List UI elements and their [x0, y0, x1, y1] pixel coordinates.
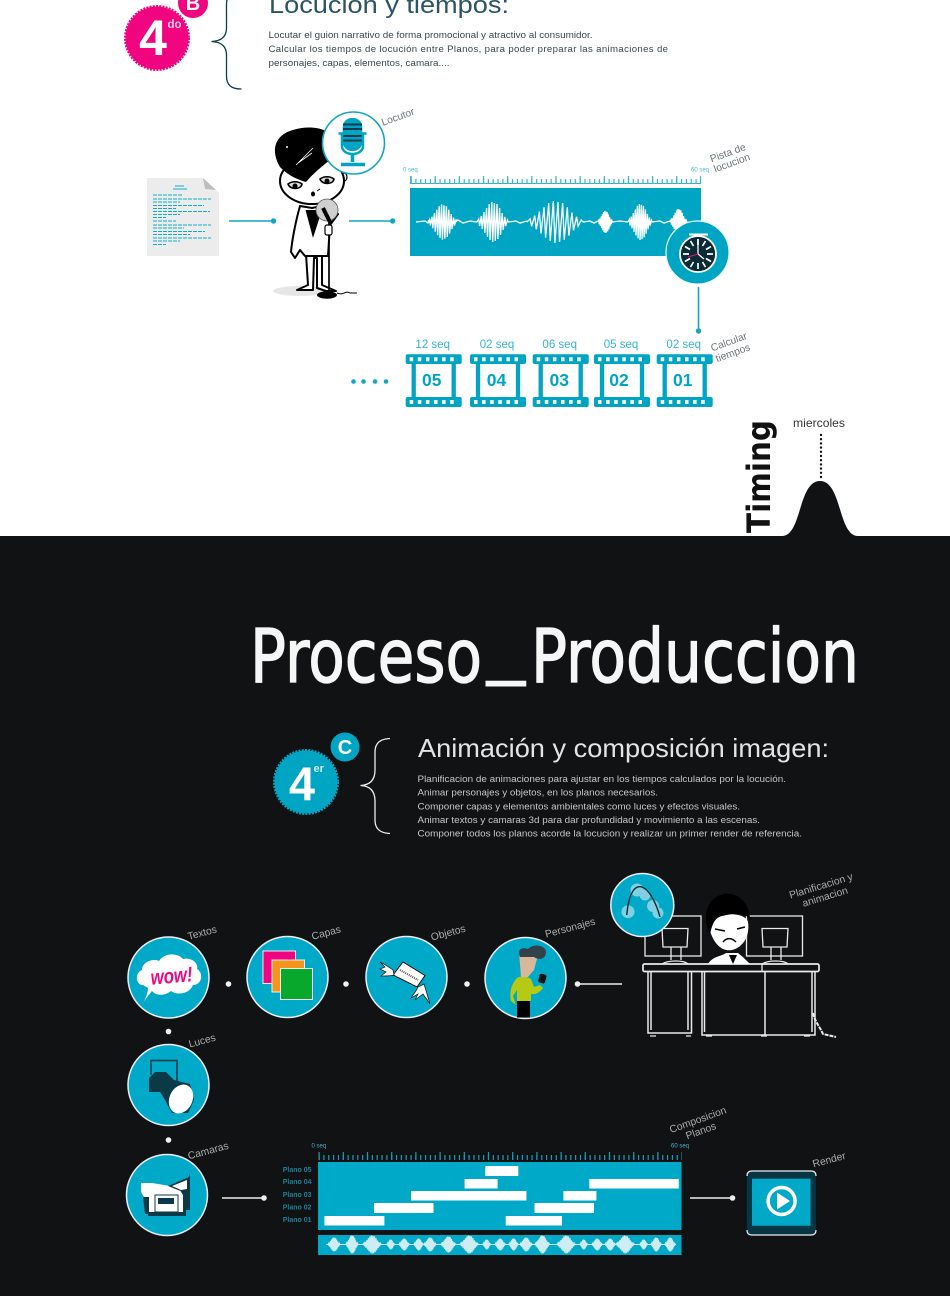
icon: script document: [147, 178, 219, 256]
icon: Objetos candy: [366, 936, 447, 1018]
title: Proceso_Produccion: [250, 604, 859, 700]
label: Composicion Planos: Composicion: [668, 1105, 728, 1136]
label: Composicion Planos: Planos: [684, 1121, 718, 1142]
label: Camaras: Camaras: [187, 1141, 230, 1162]
film frame: plano 01: 02 seq: [666, 339, 701, 351]
badge: 4do step with B tag: 4: [139, 10, 167, 66]
arrow: composition to render: [690, 1195, 735, 1201]
film frame: plano 01: [657, 339, 713, 407]
label: Capas: Capas: [311, 924, 342, 943]
film frames: shot durations: [406, 339, 713, 407]
text block: section C description: Animar personajes y objetos, en los planos necesarios.: [418, 788, 658, 798]
text block: section C description: [418, 774, 802, 840]
chart: composition timeline of planos: 0 seq: [312, 1144, 326, 1150]
connector dots: between circles: [166, 981, 470, 1143]
plano labels: Plano 01: [283, 1217, 312, 1224]
label: Render: Render: [812, 1151, 848, 1170]
badge: 4do step with B tag: do: [168, 19, 182, 31]
label: Objetos: Objetos: [430, 924, 467, 943]
icon: animation curve badge: [611, 874, 674, 936]
icon: Personajes character: [485, 938, 566, 1018]
audio strip: [318, 1235, 682, 1255]
text block: section C description: Componer todos los planos acorde la locucion y realizar un primer render de referencia.: [418, 828, 802, 840]
label: Locutor: Locutor: [380, 106, 417, 129]
badge: 4er step with C tag: 4: [289, 757, 315, 810]
icon: Camaras video camera: [126, 1154, 208, 1236]
plano labels: Plano 02: [283, 1204, 312, 1212]
heading: Animacion y composicion imagen: Animación y composición imagen:: [418, 733, 829, 763]
film frame: plano 02: 05 seq: [604, 339, 638, 351]
label: Planificacion y animacion: animacion: [801, 885, 850, 910]
icon: Render play screen: [747, 1171, 816, 1235]
film frame: plano 04: 02 seq: [480, 339, 514, 351]
badge: 4er step with C tag: C: [338, 737, 352, 759]
text block: section C description: Animar textos y camaras 3d para dar profundidad y movimiento a las escenas.: [418, 815, 760, 826]
film frame: plano 03: 06 seq: [542, 339, 577, 351]
brace: section C: [360, 738, 390, 834]
label: Pista de locucion: Pista de: [709, 142, 748, 165]
film frame: plano 05: 12 seq: [415, 339, 450, 351]
plano bars: [324, 1166, 679, 1226]
icon: studio microphone badge: [322, 112, 384, 174]
label: Textos: Textos: [187, 924, 218, 943]
icon: Textos wow bubble: wow!: [150, 963, 193, 990]
text block: section C description: Componer capas y elementos ambientales como luces y efectos visuales.: [418, 802, 740, 812]
dots: more shots: [351, 379, 388, 384]
label: Personajes: Personajes: [544, 917, 597, 941]
film frame: plano 04: 04: [487, 370, 506, 390]
label: Planificacion y animacion: Planificacion y: [788, 871, 855, 901]
timing marker: Timing miercoles: Timing: [740, 420, 778, 533]
film frame: plano 03: [533, 339, 589, 407]
label: Pista de locucion: locucion: [713, 152, 752, 175]
icon: stopwatch badge: [666, 221, 729, 284]
label: Calcular tiempos: [710, 331, 752, 365]
plano labels: Plano 03: [283, 1192, 312, 1199]
plano labels: Plano 04: [283, 1179, 312, 1186]
text block: section B description: personajes, capas, elementos, camara....: [268, 58, 450, 69]
arrow: personajes to animator: [575, 981, 622, 987]
arrow: camaras to composition: [222, 1195, 267, 1201]
chart: composition timeline of planos: [283, 1144, 689, 1255]
timing marker: Timing miercoles: miercoles: [793, 416, 845, 430]
text block: section B description: Locutar el guion narrativo de forma promocional y atractivo al consumidor.: [268, 30, 592, 41]
title: Proceso_Produccion: _: [485, 604, 526, 687]
film frame: plano 03: 03: [549, 370, 569, 390]
badge: 4er step with C tag: [274, 732, 360, 814]
timing marker: Timing miercoles: [740, 416, 845, 533]
brace: section B: [212, 0, 242, 89]
film frame: plano 02: [594, 339, 650, 407]
illustration: narrator at microphone: [273, 127, 357, 299]
icon: Luces spotlight: [128, 1044, 209, 1126]
arrow: stopwatch to shot durations: [696, 287, 701, 334]
icon: Capas layers: [247, 936, 328, 1018]
film frame: plano 02: 02: [609, 370, 629, 390]
dark panel: production background with hump: [0, 481, 950, 1296]
illustration: animator at desk: [643, 894, 836, 1037]
label: Luces: Luces: [188, 1033, 217, 1050]
icon: Textos wow bubble: [128, 937, 209, 1018]
text block: section B description: [268, 30, 668, 69]
text block: section C description: Planificacion de animaciones para ajustar en los tiempos calculados por la locución.: [418, 774, 786, 785]
arrow: narrator to audio track: [349, 218, 395, 224]
chart: narration audio track with ruler: 60 seq: [691, 168, 709, 174]
badge: 4do step with B tag: [126, 0, 208, 70]
chart: composition timeline of planos: 60 seq: [671, 1144, 689, 1150]
title: Proceso_Produccion: Proceso: [250, 614, 482, 700]
label: Calcular tiempos: tiempos: [714, 342, 752, 365]
film frame: plano 05: 05: [422, 370, 442, 390]
film frame: plano 05: [406, 339, 462, 407]
film frame: plano 04: [470, 339, 526, 407]
film frame: plano 01: 01: [673, 370, 693, 390]
arrow: document to narrator: [229, 218, 276, 224]
label: Pista de locucion: [709, 142, 752, 175]
badge: 4er step with C tag: er: [314, 763, 325, 775]
chart: narration audio track with ruler: [403, 168, 709, 256]
title: Proceso_Produccion: Produccion: [531, 614, 859, 700]
chart: narration audio track with ruler: 0 seq: [403, 168, 418, 174]
text block: section B description: Calcular los tiempos de locución entre Planos, para poder preparar las animaciones de: [268, 44, 668, 55]
plano labels: [283, 1167, 312, 1224]
label: Calcular tiempos: Calcular: [710, 331, 749, 354]
plano labels: Plano 05: [283, 1167, 312, 1174]
